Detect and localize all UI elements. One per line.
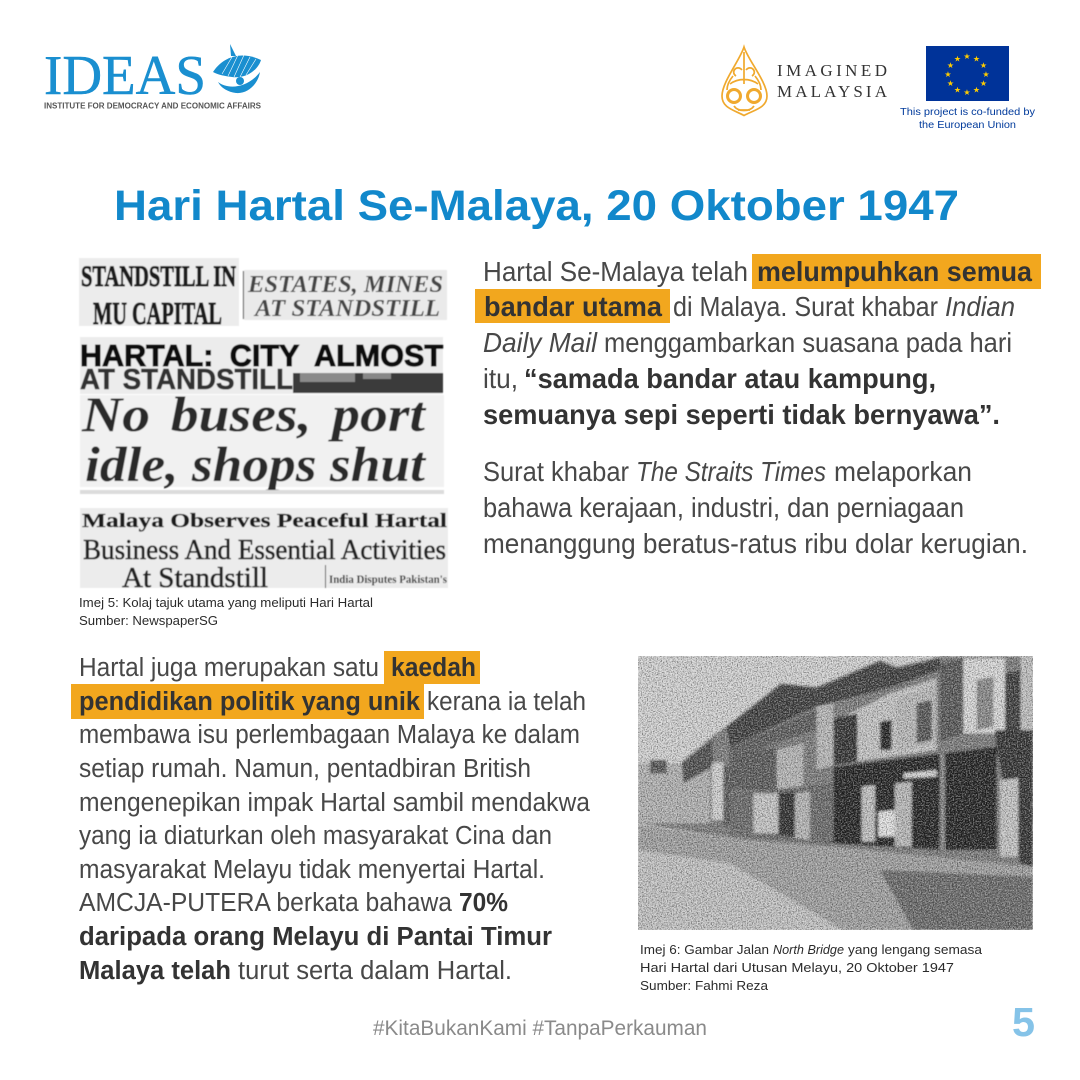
text block: top right: bandar utama [484,291,663,322]
text block: top right: Indian [945,291,1015,322]
text block: top right: “samada bandar atau kampung, [524,363,936,394]
text block: top right: menanggung beratus-ratus ribu dolar kerugian. [483,528,1028,559]
sky [638,657,940,763]
highlight: pendidikan politik yang unik [71,684,424,719]
roof and upper floor bands [727,658,940,747]
text block: bottom left: daripada orang Melayu di Pantai Timur [79,923,552,951]
halftone grain [638,656,1033,930]
text block: top right: Daily Mail [483,327,598,358]
text block: top right: melumpuhkan semua [757,256,1033,287]
clipping: No buses: idle, shops shut [85,436,427,492]
clipping: Hartal City Almost [80,337,443,396]
caption: image 6: North Bridge [773,942,844,957]
text block: bottom left: mengenepikan impak Hartal sambil mendakwa [79,789,591,817]
EU flag: ★ [980,61,987,70]
caption: image 6: Sumber: Fahmi Reza [640,978,769,993]
clipping: Hartal City Almost: HARTAL: CITY ALMOST [80,338,443,373]
EU flag: ★ [947,61,954,70]
EU flag: ★ [973,54,980,64]
text block: top right: bahawa kerajaan, industri, dan perniagaan [483,492,964,523]
text block: bottom left [71,651,591,985]
caption: image 5: Sumber: NewspaperSG [79,613,218,628]
EU flag: ★ [944,70,952,79]
EU flag: ★ [954,54,961,64]
photo: North Bridge street [638,656,1033,930]
text block: bottom left: AMCJA-PUTERA berkata bahawa [79,889,453,917]
text block: top right: Hartal Se-Malaya telah [483,256,748,287]
caption: image 5: Imej 5: Kolaj tajuk utama yang meliputi Hari Hartal [79,595,373,610]
text block: top right [475,254,1041,559]
caption: image 6 [640,942,983,993]
text block: top right: itu, [483,363,518,394]
EU funding note: This project is co-funded by [900,106,1036,118]
building mass [638,657,1033,867]
clipping: Malaya Observes: Malaya Observes Peaceful Hartal [82,510,448,532]
EU flag: ★ [980,79,987,88]
clipping: No buses [80,386,444,492]
clipping: Malaya Observes [80,508,448,594]
text block: bottom left: masyarakat Melayu tidak menyertai Hartal. [79,856,545,884]
clipping: Estates, Mines [243,270,447,322]
highlight: kaedah [384,651,480,684]
icon: wayang leaf [722,47,767,116]
text block: top right: melaporkan [834,456,972,487]
caption: image 6: yang lengang semasa [848,942,983,957]
clipping: Malaya Observes: Business And Essential Activities [83,535,446,566]
highlight: melumpuhkan semua [752,254,1041,289]
caption: image 6: Hari Hartal dari Utusan Melayu, 20 Oktober 1947 [640,960,954,975]
text block: bottom left: membawa isu perlembagaan Malaya ke dalam [79,721,580,749]
clipping: Standstill in MU Capital: MU CAPITAL [93,295,222,331]
clipping: Malaya Observes: At Standstill [122,563,268,594]
text block: bottom left: kaedah [391,654,476,682]
text block: top right: Surat khabar [483,456,629,487]
clipping: Estates, Mines: ESTATES, MINES [247,272,443,298]
page number: 5 [1012,999,1035,1045]
clipping: Standstill in MU Capital [79,258,239,331]
newspaper headline collage [79,258,448,594]
EU flag [926,46,1009,101]
clipping: No buses: No buses, port [81,386,427,442]
EU flag: ★ [973,86,980,94]
caption: image 6: Imej 6: Gambar Jalan [640,942,769,957]
logo text: IMAGINED [777,61,887,80]
logo wordmark: IDEAS [44,45,206,107]
text block: top right: menggambarkan suasana pada hari [604,327,1012,358]
clipping: Hartal City Almost: AT STANDSTILL [80,364,293,396]
text block: bottom left: kerana ia telah [427,688,586,716]
text block: bottom left: Malaya telah [79,957,231,985]
EU flag: ★ [963,88,971,97]
logo: European Union [900,46,1036,131]
title: Hari Hartal Se-Malaya, 20 Oktober 1947 [114,182,959,230]
text block: top right: The Straits Times [636,456,826,487]
EU flag: ★ [954,86,961,94]
clipping: Standstill in MU Capital: STANDSTILL IN [81,260,236,293]
text block: top right: semuanya sepi seperti tidak bernyawa”. [483,399,1000,430]
logo tagline: INSTITUTE FOR DEMOCRACY AND ECONOMIC AFFAIRS [44,102,262,110]
logo: Imagined Malaysia: MALAYSIA [777,82,888,101]
caption: image 5 [79,595,373,628]
text block: bottom left: yang ia diaturkan oleh masyarakat Cina dan [79,822,552,850]
logo: Imagined Malaysia [722,47,888,116]
EU flag: ★ [947,79,954,88]
street [638,825,1033,930]
EU flag: ★ [982,70,990,79]
icon: IDEAS bird [213,44,261,93]
text block: top right: di Malaya. Surat khabar [673,291,938,322]
EU flag: ★ [963,52,971,61]
clipping: Malaya Observes: India Disputes Pakistan's [329,572,447,586]
text block: bottom left: setiap rumah. Namun, pentadbiran British [79,755,531,783]
highlight: bandar utama [475,289,670,323]
text block: bottom left: 70% [459,889,508,917]
text block: bottom left: pendidikan politik yang unik [79,688,421,716]
text block: bottom left: turut serta dalam Hartal. [238,957,512,985]
clipping: Estates, Mines: AT STANDSTILL [253,296,440,322]
logo: European Union: the European Union [919,119,1016,131]
hashtags footer: #KitaBukanKami #TanpaPerkauman [373,1016,707,1040]
logo: IDEAS [44,44,262,110]
clipping edge [80,490,444,494]
arcade shadows [833,747,997,850]
text block: bottom left: Hartal juga merupakan satu [79,654,379,682]
